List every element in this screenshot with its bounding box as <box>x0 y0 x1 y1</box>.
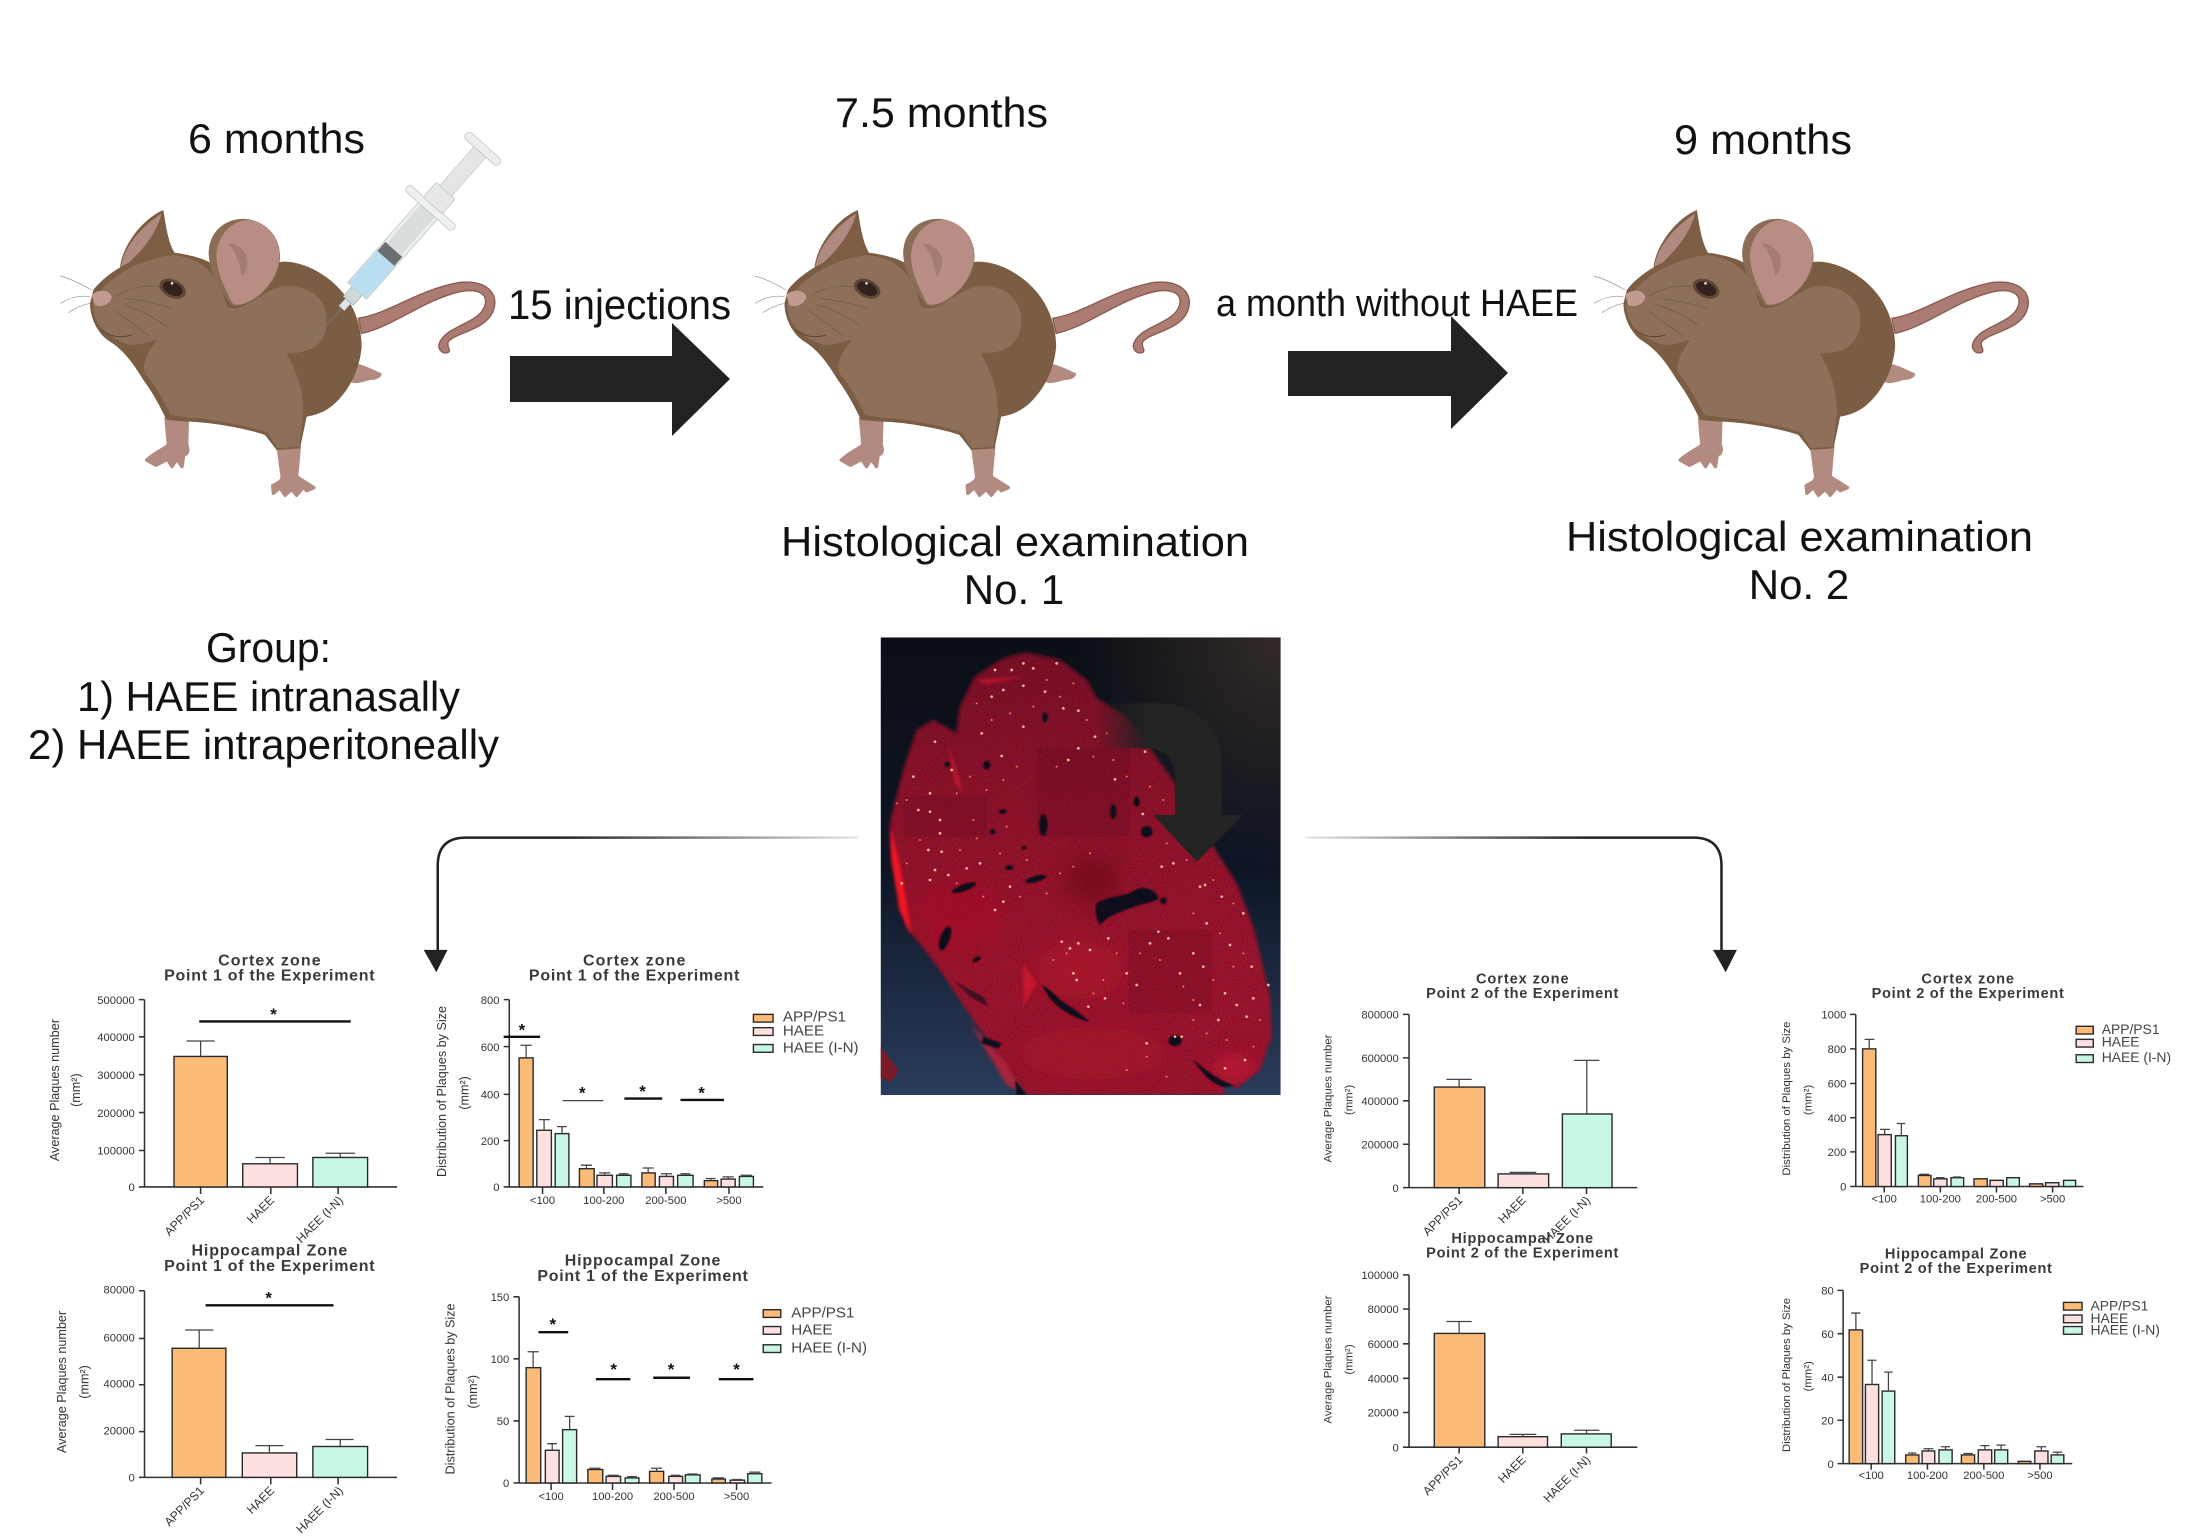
text: histological examination no. 2: No. 2 <box>1749 561 1849 608</box>
y-axis label <box>48 1019 83 1161</box>
chart: hippocampal zone average plaques, point 1 <box>55 1243 397 1536</box>
legend: APP/PS1 <box>791 1304 854 1321</box>
legend <box>753 1008 859 1056</box>
chart: cortex zone average plaques, point 2 <box>1322 972 1637 1246</box>
chart title: Cortex zone <box>1921 972 2014 988</box>
legend: HAEE (I-N) <box>2090 1321 2160 1337</box>
y-axis ticks <box>491 1292 509 1490</box>
y-axis label <box>435 1006 472 1177</box>
error bars <box>1851 1313 2062 1455</box>
x labels: >500 <box>2027 1470 2053 1482</box>
legend: APP/PS1 <box>2102 1021 2160 1037</box>
connector arrow: image to point 2 charts <box>1305 838 1737 972</box>
x labels: APP/PS1 <box>1420 1193 1466 1239</box>
x labels: HAEE <box>1495 1453 1529 1486</box>
y-axis label: (mm²) <box>466 1375 480 1409</box>
axes <box>504 1000 763 1194</box>
legend: HAEE <box>2102 1034 2139 1050</box>
label: 6 months: 6 months <box>188 115 365 162</box>
y-axis ticks: 0 <box>1393 1183 1399 1195</box>
y-axis ticks: 1000 <box>1821 1010 1846 1022</box>
x labels: 100-200 <box>592 1491 633 1503</box>
chart title: Point 1 of the Experiment <box>164 968 375 985</box>
axes <box>1850 1014 2083 1193</box>
x labels <box>1872 1193 2065 1205</box>
axes <box>513 1297 772 1490</box>
error bars <box>1446 1321 1599 1437</box>
bars <box>172 1348 368 1477</box>
bars <box>1863 1049 2076 1187</box>
y-axis label: Distribution of Plaques by Size <box>435 1006 449 1177</box>
x labels: HAEE (I-N) <box>293 1193 346 1246</box>
x labels: >500 <box>2040 1193 2065 1205</box>
text: histological examination no. 2 <box>1566 513 2033 608</box>
legend <box>2076 1021 2171 1065</box>
y-axis ticks: 80000 <box>103 1285 135 1297</box>
y-axis ticks: 400000 <box>97 1032 135 1044</box>
error bars <box>528 1352 760 1480</box>
y-axis ticks: 40 <box>1821 1372 1834 1384</box>
y-axis label <box>1322 1034 1355 1163</box>
x labels: 200-500 <box>653 1491 695 1503</box>
significance marker: * <box>270 1005 277 1024</box>
y-axis ticks: 100 <box>491 1354 509 1366</box>
text: treatment groups: Group: <box>206 624 331 671</box>
bars <box>526 1368 762 1483</box>
dark holes in tissue <box>936 712 1233 1095</box>
axes <box>139 1291 397 1484</box>
arrow: 6 to 7.5 months <box>510 323 730 436</box>
x labels: HAEE <box>1495 1193 1529 1226</box>
y-axis ticks: 60000 <box>103 1332 135 1344</box>
y-axis ticks: 40000 <box>1368 1374 1399 1386</box>
y-axis label <box>1781 1022 1814 1176</box>
y-axis label: (mm²) <box>1802 1361 1814 1391</box>
label: a month without HAEE: a month without HAEE <box>1216 283 1578 325</box>
x labels: APP/PS1 <box>162 1193 207 1239</box>
x labels <box>162 1483 346 1536</box>
y-axis ticks <box>103 1285 135 1485</box>
y-axis ticks <box>97 995 135 1194</box>
y-axis label: (mm²) <box>1802 1085 1814 1115</box>
y-axis ticks: 0 <box>1827 1459 1834 1471</box>
significance markers: * <box>519 1020 526 1039</box>
y-axis ticks: 200000 <box>97 1108 135 1120</box>
text: treatment groups <box>28 624 499 768</box>
chart title: Hippocampal Zone <box>565 1253 721 1270</box>
bright plaque dots <box>902 663 1268 1068</box>
chart title: Point 2 of the Experiment <box>1426 1246 1619 1262</box>
x labels: <100 <box>1872 1193 1897 1205</box>
y-axis label <box>444 1303 480 1474</box>
y-axis ticks: 600000 <box>1361 1053 1399 1065</box>
y-axis ticks: 60 <box>1821 1329 1834 1341</box>
axes <box>1838 1290 2072 1470</box>
legend: APP/PS1 <box>2090 1297 2149 1313</box>
x labels: HAEE <box>244 1193 277 1226</box>
y-axis ticks: 20000 <box>1368 1408 1399 1420</box>
y-axis ticks: 50 <box>497 1416 509 1428</box>
axes <box>1403 1014 1637 1194</box>
icon: mouse receiving injection with syringe <box>60 125 509 495</box>
y-axis ticks: 800000 <box>1361 1010 1399 1022</box>
curved arrow overlay <box>1100 703 1243 862</box>
chart title: Point 2 of the Experiment <box>1426 986 1619 1002</box>
y-axis ticks: 600 <box>1828 1079 1846 1091</box>
text: histological examination no. 1: No. 1 <box>964 566 1064 613</box>
y-axis label <box>1322 1295 1355 1423</box>
y-axis ticks: 100000 <box>97 1146 135 1158</box>
y-axis label: (mm²) <box>1343 1344 1355 1375</box>
axes <box>139 1000 397 1194</box>
legend: HAEE (I-N) <box>783 1039 859 1056</box>
x labels: 100-200 <box>1907 1470 1948 1482</box>
x labels <box>538 1491 749 1503</box>
y-axis ticks: 200 <box>481 1136 499 1148</box>
y-axis ticks: 800 <box>1828 1044 1846 1056</box>
x labels: HAEE (I-N) <box>1541 1453 1593 1505</box>
icon: mouse at 7.5 months <box>754 210 1189 495</box>
y-axis ticks <box>1361 1010 1399 1195</box>
icon: syringe <box>289 125 509 362</box>
significance markers: * <box>579 1084 586 1103</box>
y-axis label: (mm²) <box>77 1365 91 1399</box>
text: histological examination no. 2: Histological examination <box>1566 513 2033 560</box>
label: 7.5 months: 7.5 months <box>835 89 1048 136</box>
x labels: 100-200 <box>1920 1193 1961 1205</box>
significance markers: * <box>550 1315 557 1334</box>
x labels <box>1420 1453 1593 1505</box>
chart title: Point 1 of the Experiment <box>164 1258 375 1275</box>
error bars <box>1865 1039 1961 1179</box>
chart title: Cortex zone <box>583 952 685 969</box>
y-axis ticks: 0 <box>1393 1442 1399 1454</box>
chart title: Point 1 of the Experiment <box>529 968 740 985</box>
legend: HAEE (I-N) <box>2102 1049 2171 1065</box>
y-axis ticks: 20 <box>1821 1415 1834 1427</box>
bars <box>1849 1330 2064 1464</box>
y-axis ticks: 800 <box>481 995 499 1007</box>
significance markers <box>538 1315 753 1379</box>
label: 9 months: 9 months <box>1674 116 1852 163</box>
y-axis ticks <box>481 995 499 1194</box>
chart title: Cortex zone <box>1476 972 1569 988</box>
y-axis ticks: 500000 <box>97 995 135 1007</box>
y-axis label: Average Plaques number <box>1322 1034 1334 1163</box>
chart: hippocampal zone average plaques, point 2 <box>1322 1231 1637 1505</box>
y-axis ticks: 400000 <box>1361 1096 1399 1108</box>
x labels: >500 <box>724 1491 749 1503</box>
chart: cortex zone plaques by size, point 1 <box>435 952 859 1207</box>
chart: hippocampal zone plaques by size, point 2 <box>1781 1246 2160 1482</box>
x labels: <100 <box>530 1195 555 1207</box>
y-axis label: Distribution of Plaques by Size <box>1781 1298 1793 1452</box>
legend: APP/PS1 <box>783 1008 846 1025</box>
y-axis ticks: 0 <box>128 1182 135 1194</box>
error bars <box>1446 1060 1599 1174</box>
chart: cortex zone average plaques, point 1 <box>48 952 397 1246</box>
legend: HAEE <box>783 1022 824 1039</box>
connector arrow: image to point 1 charts <box>424 838 859 972</box>
error bars <box>185 1330 354 1453</box>
significance markers: * <box>610 1360 617 1379</box>
y-axis label: Average Plaques number <box>1322 1295 1334 1423</box>
y-axis label: Average Plaques number <box>48 1019 62 1161</box>
chart title: Point 2 of the Experiment <box>1872 986 2064 1002</box>
x labels: >500 <box>716 1195 742 1207</box>
x labels <box>162 1193 346 1246</box>
legend: HAEE <box>2090 1310 2128 1326</box>
x labels: 200-500 <box>1963 1470 2004 1482</box>
chart title: Point 2 of the Experiment <box>1860 1261 2052 1277</box>
text: treatment groups: 1) HAEE intranasally <box>77 673 460 720</box>
y-axis ticks: 0 <box>503 1478 509 1490</box>
chart title: Cortex zone <box>218 952 321 969</box>
y-axis ticks: 80 <box>1821 1286 1834 1298</box>
axes <box>1403 1275 1637 1454</box>
legend <box>763 1304 867 1356</box>
chart title: Hippocampal Zone <box>1451 1231 1593 1247</box>
significance marker <box>206 1288 333 1307</box>
y-axis ticks: 0 <box>493 1182 499 1194</box>
x labels <box>530 1195 742 1207</box>
chart title: Point 1 of the Experiment <box>537 1268 748 1285</box>
significance markers: * <box>698 1084 705 1103</box>
bars <box>1434 1087 1612 1188</box>
y-axis label: Distribution of Plaques by Size <box>1781 1022 1793 1176</box>
x labels <box>1420 1193 1593 1246</box>
bars <box>519 1058 753 1187</box>
y-axis ticks: 150 <box>491 1292 509 1304</box>
y-axis ticks: 60000 <box>1368 1339 1399 1351</box>
x labels: 100-200 <box>583 1195 624 1207</box>
y-axis label <box>1781 1298 1814 1452</box>
y-axis label: Average Plaques number <box>55 1311 69 1453</box>
y-axis label: Distribution of Plaques by Size <box>444 1303 458 1474</box>
text: histological examination no. 1: Histological examination <box>781 518 1249 565</box>
y-axis label <box>55 1311 91 1453</box>
significance marker: * <box>265 1288 272 1307</box>
error bars <box>187 1041 355 1164</box>
y-axis ticks: 200 <box>1828 1147 1846 1159</box>
legend: HAEE <box>791 1321 833 1338</box>
panel: fluorescence micrograph of brain section <box>881 637 1281 1095</box>
x labels: HAEE (I-N) <box>293 1484 346 1536</box>
y-axis ticks <box>1821 1286 1834 1471</box>
y-axis ticks: 20000 <box>103 1425 135 1437</box>
x labels: 200-500 <box>645 1195 686 1207</box>
error bars <box>521 1045 752 1181</box>
label: 15 injections: 15 injections <box>508 281 731 328</box>
significance markers: * <box>639 1082 646 1101</box>
significance markers: * <box>733 1360 740 1379</box>
bars <box>174 1056 368 1187</box>
chart title: Hippocampal Zone <box>192 1243 347 1260</box>
x labels: APP/PS1 <box>1420 1453 1466 1498</box>
text: treatment groups: 2) HAEE intraperitoneally <box>28 721 499 768</box>
significance markers: * <box>668 1360 675 1379</box>
y-axis ticks: 80000 <box>1368 1304 1399 1316</box>
legend: HAEE (I-N) <box>791 1339 867 1356</box>
y-axis ticks: 400 <box>1828 1113 1846 1125</box>
darker image tiles <box>903 748 1212 1013</box>
x labels: APP/PS1 <box>162 1483 207 1529</box>
x labels: <100 <box>538 1491 564 1503</box>
y-axis ticks: 200000 <box>1361 1139 1399 1151</box>
y-axis ticks: 400 <box>481 1090 499 1102</box>
x labels: 200-500 <box>1976 1193 2017 1205</box>
chart: hippocampal zone plaques by size, point 1 <box>444 1253 867 1503</box>
chart: cortex zone plaques by size, point 2 <box>1781 972 2171 1205</box>
text: histological examination no. 1 <box>781 518 1249 613</box>
y-axis ticks <box>1821 1010 1846 1194</box>
y-axis ticks: 40000 <box>103 1379 135 1391</box>
icon: mouse at 9 months <box>1593 210 2028 495</box>
x labels: <100 <box>1859 1470 1884 1482</box>
y-axis ticks: 300000 <box>97 1070 135 1082</box>
significance markers <box>504 1020 724 1103</box>
y-axis ticks <box>1361 1270 1399 1454</box>
y-axis ticks: 600 <box>481 1042 499 1054</box>
y-axis ticks: 0 <box>128 1473 135 1485</box>
x labels <box>1859 1470 2053 1482</box>
bars <box>1434 1333 1611 1447</box>
y-axis label: (mm²) <box>1343 1085 1355 1115</box>
x labels: HAEE <box>244 1484 277 1517</box>
legend <box>2064 1297 2160 1337</box>
y-axis label: (mm²) <box>458 1076 472 1110</box>
chart title: Hippocampal Zone <box>1885 1246 2027 1262</box>
arrow: 7.5 to 9 months <box>1288 316 1508 429</box>
y-axis label: (mm²) <box>69 1073 83 1107</box>
y-axis ticks: 100000 <box>1361 1270 1399 1282</box>
x labels: HAEE (I-N) <box>1541 1193 1593 1246</box>
y-axis ticks: 0 <box>1840 1182 1846 1194</box>
